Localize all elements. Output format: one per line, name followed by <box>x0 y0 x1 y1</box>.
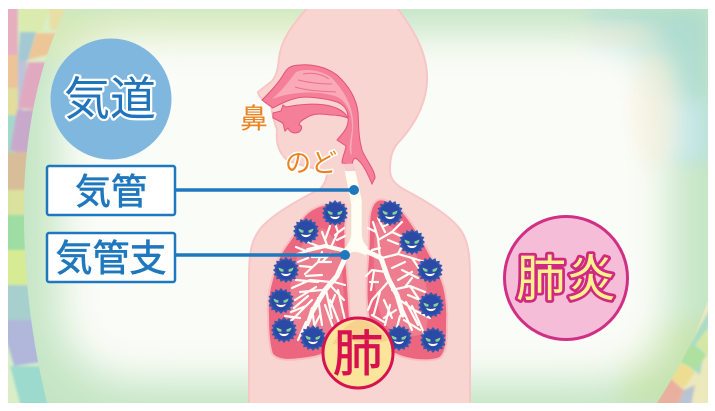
trachea <box>341 164 368 259</box>
circle: 肺炎: 肺炎 <box>516 251 616 307</box>
label box: 気管: 気管 <box>75 171 147 212</box>
label: のど: のど <box>285 148 337 178</box>
viruses <box>268 200 446 353</box>
right rainbow band <box>657 300 708 403</box>
circle: 気道: 気道 <box>64 73 156 125</box>
human body silhouette <box>249 5 470 411</box>
right lung <box>366 199 447 360</box>
airway: nose and throat <box>262 65 375 184</box>
circle: 肺炎 <box>504 216 628 340</box>
leader line: 気管 <box>175 185 359 195</box>
label box: 気管 <box>47 166 175 215</box>
circle: 肺 <box>323 318 393 388</box>
circle: 肺: 肺 <box>333 326 383 382</box>
bronchial tree: left <box>285 221 346 340</box>
left lung <box>268 202 350 360</box>
label: 鼻: 鼻 <box>240 103 268 134</box>
leader line: 気管支 <box>175 250 350 260</box>
label box: 気管支: 気管支 <box>56 238 166 279</box>
bronchial tree: right <box>366 218 430 340</box>
left rainbow band <box>8 9 66 403</box>
circle: 気道 <box>50 38 172 160</box>
